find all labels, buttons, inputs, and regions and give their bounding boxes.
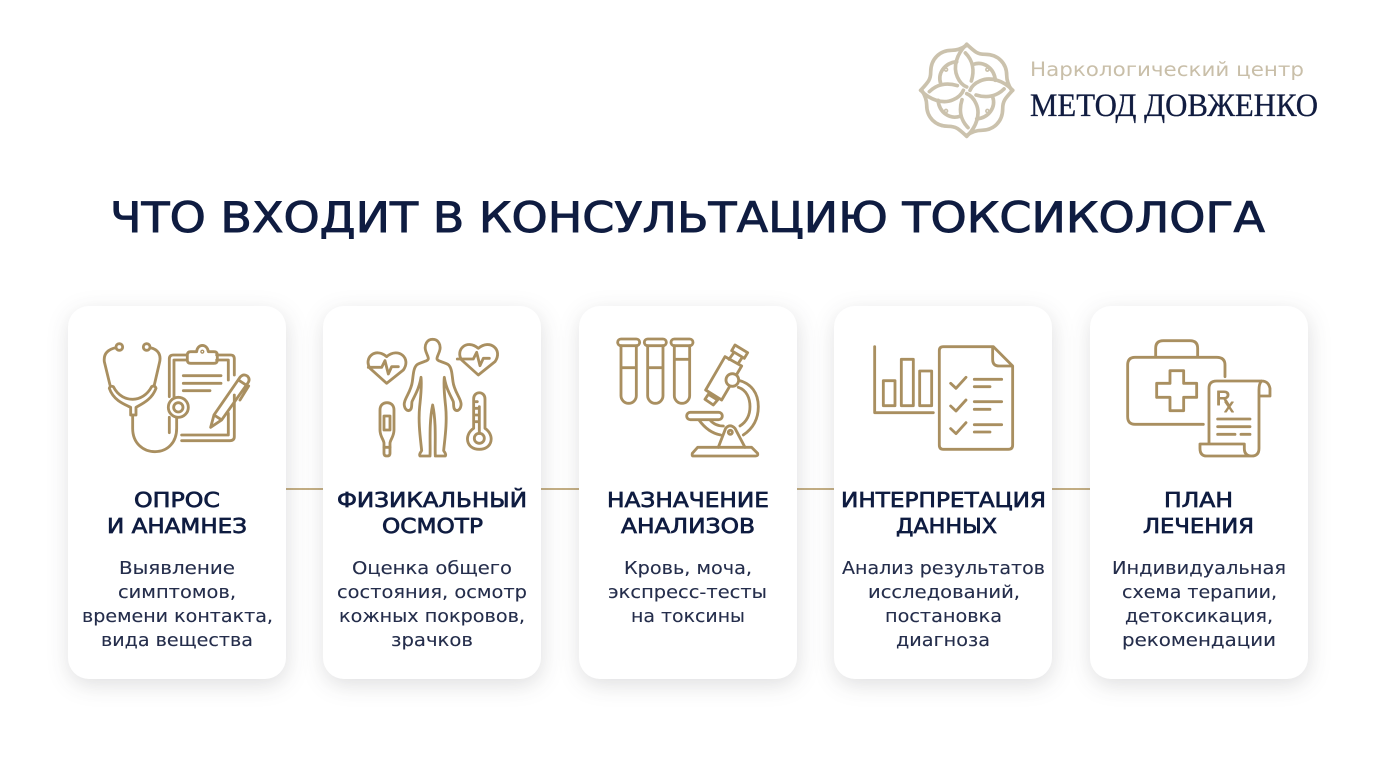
description: [842, 558, 1045, 651]
logo: [921, 44, 1318, 136]
description: времени контакта,: [82, 606, 273, 627]
description: на токсины: [631, 606, 745, 627]
icon: body, hearts and thermometers: [368, 339, 498, 456]
description: Индивидуальная: [1112, 558, 1286, 579]
icon: first aid case and prescription: x: [1224, 395, 1234, 416]
heading: ПЛАН: [1164, 488, 1233, 512]
connector lines: [284, 488, 1092, 490]
heading: [107, 488, 247, 538]
panel: физикальный осмотр: [323, 306, 541, 679]
description: [1112, 558, 1286, 651]
description: Анализ результатов: [842, 558, 1045, 579]
icon: test tubes and microscope: [618, 339, 758, 456]
description: Выявление: [119, 558, 235, 579]
panel: опрос и анамнез: [68, 306, 286, 679]
heading: ФИЗИКАЛЬНЫЙ: [337, 487, 527, 512]
heading: АНАЛИЗОВ: [621, 514, 755, 538]
description: вида вещества: [101, 630, 253, 651]
logo subtitle: Наркологический центр: [1030, 58, 1304, 81]
description: зрачков: [391, 630, 473, 651]
icon: bar chart and checklist: [875, 347, 1013, 449]
description: [337, 558, 527, 651]
description: [82, 558, 273, 651]
description: постановка: [885, 606, 1002, 627]
heading: ОПРОС: [134, 488, 220, 512]
heading: ИНТЕРПРЕТАЦИЯ: [841, 488, 1046, 512]
heading: [337, 487, 527, 538]
icon: stethoscope and clipboard: [104, 344, 249, 452]
icon: first aid case and prescription: R: [1216, 388, 1230, 410]
description: экспресс-тесты: [608, 582, 767, 603]
heading: [1143, 488, 1254, 538]
heading: ДАННЫХ: [896, 514, 997, 538]
description: [608, 558, 767, 627]
title: ЧТО ВХОДИТ В КОНСУЛЬТАЦИЮ ТОКСИКОЛОГА: [110, 193, 1266, 242]
panel: план лечения: [1090, 306, 1308, 679]
description: состояния, осмотр: [337, 582, 527, 603]
description: детоксикация,: [1125, 606, 1273, 627]
heading: ЛЕЧЕНИЯ: [1143, 514, 1254, 538]
panel: назначение анализов: [579, 306, 797, 679]
logo name: МЕТОД ДОВЖЕНКО: [1030, 88, 1318, 124]
description: Кровь, моча,: [624, 558, 752, 579]
heading: ОСМОТР: [382, 514, 483, 538]
description: кожных покровов,: [339, 606, 525, 627]
heading: [841, 488, 1046, 538]
icon: first aid case and prescription: [1128, 341, 1270, 456]
description: исследований,: [868, 582, 1020, 603]
description: Оценка общего: [352, 558, 512, 579]
description: симптомов,: [118, 582, 236, 603]
description: рекомендации: [1122, 630, 1276, 651]
heading: [607, 488, 769, 538]
description: диагноза: [896, 630, 990, 651]
description: схема терапии,: [1122, 582, 1277, 603]
heading: И АНАМНЕЗ: [107, 514, 247, 538]
heading: НАЗНАЧЕНИЕ: [607, 488, 769, 512]
icon: logo knot: [921, 44, 1013, 136]
panel: интерпретация данных: [834, 306, 1052, 679]
